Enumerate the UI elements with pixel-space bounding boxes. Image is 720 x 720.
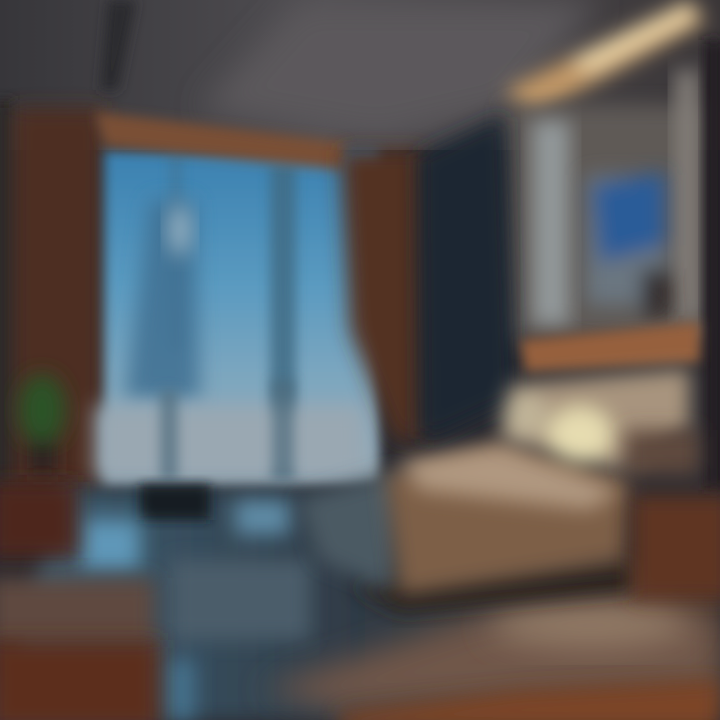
right wall (505, 70, 705, 340)
distant tower (125, 200, 200, 400)
left curtain (12, 108, 104, 488)
rug (260, 590, 720, 710)
window (95, 150, 379, 485)
floor sill shadow (140, 485, 210, 520)
foreground wooden table (340, 680, 720, 720)
bed side sheet (300, 470, 400, 590)
blanket upper highlight (400, 445, 620, 510)
floor reflection (80, 500, 310, 720)
curtain valance (95, 112, 345, 170)
bed blanket (385, 445, 630, 595)
left wall dark edge (0, 100, 14, 500)
cove light strip (505, 0, 705, 118)
dark navy curtain (418, 115, 515, 440)
right curtain (340, 150, 425, 440)
ceiling beam (100, 0, 136, 90)
ceiling (0, 0, 720, 150)
lower mullions (160, 380, 294, 480)
rug highlight (490, 603, 690, 647)
bed base shadow (350, 560, 640, 612)
foreground sofa (0, 578, 160, 720)
window mullions (170, 150, 296, 475)
headboard (520, 322, 700, 372)
tower highlight (168, 204, 192, 256)
right armchair (625, 430, 720, 600)
wall art (586, 172, 672, 318)
horizon glow (95, 405, 365, 480)
pillows (500, 368, 690, 470)
far right dark column (704, 40, 720, 490)
plant (18, 374, 66, 475)
floor (0, 490, 720, 720)
left armchair (0, 482, 78, 558)
